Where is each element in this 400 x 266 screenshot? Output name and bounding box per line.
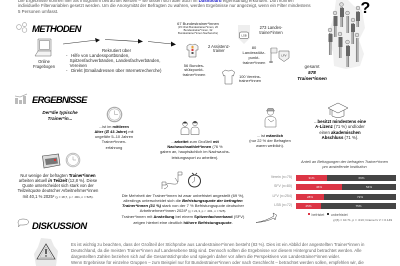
icon: gears: [16, 22, 28, 33]
text: male: ... ist männlich: [257, 132, 283, 138]
subheading: typical trainer: Der*die typische: [42, 110, 78, 114]
text: male: waren weiblich).: [256, 143, 284, 148]
question mark: ?: [360, 0, 370, 16]
text: male: (nur 22 % der Befragten: [249, 138, 291, 143]
legend: χ²(3) = 10.71, p = .013; Cramer's V = 0.149: [333, 218, 392, 222]
federal trainers text: Bundestrainer*innen, 32: [184, 29, 212, 32]
label: online questionnaire: Online: [38, 59, 50, 64]
icon: club shirt: [222, 70, 235, 84]
label: state base trainers: trainer*innen: [243, 60, 265, 65]
label: state base trainers: punkt-: [248, 55, 260, 60]
arrow 1: [63, 38, 100, 44]
icon: shirt with colours: [186, 44, 198, 58]
label: state trainers: [259, 25, 283, 35]
text: age: erfahrung: [106, 145, 122, 150]
row label: LFV: LFV (n=254): [272, 194, 292, 198]
text: youth athletes: gaben an, hauptsächlich im Nachwuchs-: [160, 149, 230, 154]
legend: [308, 212, 398, 224]
icon: laptop: [34, 38, 52, 56]
text: fixed-term: Die Mehrheit der Trainer*innen ist zwar unbefristet angestellt (69 %),: [122, 192, 244, 198]
bar: LSB: 75%: [355, 204, 362, 208]
text: age: ungefähr 5–10 Jahren: [95, 134, 133, 139]
text: part time: [18, 172, 98, 199]
bar: SFV: [296, 184, 396, 190]
bar: LSB: [296, 203, 396, 209]
text: youth athletes: [160, 139, 230, 160]
text: part time: Quote unterscheidet sich stark von der: [22, 183, 94, 188]
text: age: [94, 124, 134, 150]
bar: LSB: 25%: [305, 204, 312, 208]
text: age: Alter (∅ 43 Jahre) mit: [94, 129, 134, 134]
text: fixed-term: [122, 192, 244, 225]
bar: LFV: [296, 194, 396, 200]
federal trainers text: Bundestrainer*innen Nachwuchs): [178, 32, 218, 35]
bar: SFV: 46%: [316, 185, 322, 189]
recruiting text: - Direkt (Emailadressen über Internetrecherche): [66, 68, 161, 73]
chart title: pro anstellende Institution: [322, 164, 367, 169]
text: licence and degree: Abschluss (71 %).: [322, 135, 358, 140]
row label: Verein: Verein (n=75): [271, 174, 292, 178]
label: state trainers: trainer*innen: [259, 30, 283, 35]
text: licence and degree: A-Lizenz (71 %) und/oder: [315, 124, 365, 129]
icon: LFV shield: [278, 50, 290, 62]
discussion text: dargestellten Zahlen beziehen sich auf die Gesamtstichprobe und spiegeln daher vor allem die Perspektiven von Landestrainer*innen wider.: [71, 254, 340, 259]
icon: clock small: [66, 152, 80, 168]
label: online questionnaire: [33, 59, 55, 69]
text: fixed-term: Trainer*innen (31 %) stark von der 7 % Befristungsquote deutscher: [122, 203, 244, 208]
icon: calendar: [42, 154, 60, 168]
intro text: 5 Personen umfasst.: [18, 9, 58, 14]
text: male: [249, 132, 291, 148]
recruiting text: Rekrutiert über: [102, 48, 131, 52]
label: assistant trainers: [208, 44, 230, 53]
discussion text: Wenn Ergebnisse für einzelne Gruppen – zum Beispiel nur für Bundestrainer*innen oder nach Geschlecht – betrachtet werden sollen, empfehlen wir, die: [71, 260, 364, 265]
total trainers: [297, 64, 327, 81]
icon: speech bubble: [17, 218, 29, 228]
icon: clock: [106, 106, 122, 122]
discussion text: Deutschland, da die meisten Trainer*innen auf Landesebene tätig sind. Dennoch sollten die Ergebnisse vor diesem Hintergrund betrachtet werden. Alle: [71, 248, 362, 253]
text: fixed-term: zeigen hierbei eine deutlich höhere Befristungsquote.: [133, 220, 233, 225]
chart title: [300, 158, 388, 169]
label: state base trainers: 80: [252, 45, 256, 50]
text: part time: Nur wenige der befragten Trainer*innen: [20, 172, 96, 178]
label: club trainers: [239, 74, 261, 83]
subheading: typical trainer: Trainer*in...: [48, 116, 72, 120]
icon: two young athletes: [180, 121, 200, 135]
arrow 2: [105, 39, 143, 44]
label: 56 Bundesstützpunkt trainers: trainer*innen: [183, 72, 205, 77]
label: online questionnaire: Fragebogen: [33, 64, 55, 69]
icon: flag: [269, 48, 278, 63]
discussion text: Es ist wichtig zu beachten, dass der Großteil der Stichprobe aus Landestrainer*innen besteht (83 %). Dies ist ein Abbild der angestellten Trainer*innen in: [71, 242, 364, 247]
icon: bar chart: [15, 94, 28, 104]
federal trainers text: (15 Chef-Bundestrainer*innen, 20: [178, 26, 218, 29]
text: fixed-term: Trainer*innen mit Anstellung bei einem Spitzenfachverband (SFV): [122, 214, 244, 219]
icon: path with flags: [162, 172, 182, 190]
total trainers: Trainer*innen: [297, 76, 327, 81]
row label: LSB: LSB (n=72): [274, 202, 292, 206]
federal trainers text: 67 Bundestrainer*innen: [177, 20, 219, 26]
recruiting text: Spitzenfachverbänden, Landesfachverbänden,: [70, 58, 160, 63]
icon: graduation cap: [328, 102, 348, 118]
label: state base trainers: [242, 45, 266, 65]
stacked bar chart labels: [271, 174, 292, 207]
text: youth athletes: Nachwuchsathlet*innen (76 %: [167, 144, 223, 149]
text: part time: mit 40,1 % 2025² (χ = 18,7, p < .001, n = 525).: [23, 194, 93, 199]
recruiting text: - Hilfe von Landessportbünden,: [66, 53, 129, 58]
arrow 3: [148, 41, 176, 46]
bar: Verein: 31%: [308, 176, 314, 180]
discussion text: [71, 242, 396, 266]
total trainers: gesamt: [304, 64, 320, 69]
icon: warning triangle on Germany map: [32, 238, 60, 266]
text: licence and degree: ...besitzt mindestens eine: [314, 118, 366, 124]
row label: SFV: SFV (n=80): [274, 184, 292, 188]
bar: SFV: 54%: [366, 185, 372, 189]
text: part time: arbeiten aktuell in Teilzeit (12,8 %). Diese: [19, 178, 97, 183]
intro text: individuelle Filtervariablen gesetzt werden. Um die Anonymität der Befragten zu wahren, werden Ergebnisse nur angezeigt, wenn ein Filter mindestens: [18, 3, 311, 8]
icon: LSB shield: LSB: [241, 34, 247, 38]
label: assistant trainers: 2 Assistenz-: [208, 44, 230, 48]
heading: Diskussion: DISKUSSION: [32, 220, 87, 230]
heading: Ergebnisse: ERGEBNISSE: [32, 94, 87, 105]
label: 56 Bundesstützpunkt trainers: stützpunkt-: [184, 67, 204, 72]
bar: LFV: 72%: [357, 195, 363, 199]
recruiting text: [66, 48, 162, 73]
text: fixed-term: Arbeitnehmer*innen 2024² (χ = 21,3, p < .001, n = 525).: [140, 208, 226, 213]
label: 56 Bundesstützpunkt trainers: 56 Bundes-: [184, 62, 204, 68]
federal trainers text: [177, 20, 219, 35]
arrow to chart: [256, 212, 277, 223]
heading: Methoden: METHODEN: [32, 22, 81, 34]
text: part time: Teilzeitquote deutscher Arbeitnehmer*innen: [18, 188, 98, 193]
label: state base trainers: Landesstütz-: [243, 50, 265, 55]
label: assistant trainers: trainer: [213, 48, 225, 53]
bar: Verein: [296, 175, 396, 181]
icon: stopwatch: [188, 172, 201, 188]
bar: Verein: 69%: [358, 176, 364, 180]
text: youth athletes: ...arbeitet zum Großteil mit: [171, 139, 219, 144]
text: age: Trainer*innen-: [102, 139, 126, 144]
icon: LSB shield: [238, 25, 250, 44]
legend: befristet unbefristet: [312, 212, 348, 216]
icon: LFV shield: LFV: [281, 54, 287, 58]
label: club trainers: trainer*innen: [239, 78, 261, 83]
recruiting text: Vereinen: [70, 63, 87, 68]
illustration: map of Germany with trainers: [328, 0, 365, 69]
text: fixed-term: allerdings unterscheidet sich die Befristungsquote der befragten: [123, 198, 243, 203]
icon: man with cap: [264, 108, 276, 128]
text: licence and degree: einen akademischen: [319, 130, 361, 134]
total trainers: 578: [308, 70, 316, 75]
subheading: typical trainer: [42, 110, 78, 120]
chart title: Anteil an Befragungen der befragten Trainer*innen: [301, 158, 388, 164]
text: age: ...ist im mittleren: [99, 124, 129, 128]
label: state trainers: 273 Landes-: [260, 25, 282, 30]
bar: LFV: 28%: [307, 195, 313, 199]
text: licence and degree: [314, 118, 366, 140]
text: youth athletes: leistungssport zu arbeiten).: [172, 155, 218, 160]
intro text: [18, 0, 311, 14]
label: 56 Bundesstützpunkt trainers: [182, 62, 206, 77]
label: club trainers: 100 Vereins-: [239, 74, 261, 78]
